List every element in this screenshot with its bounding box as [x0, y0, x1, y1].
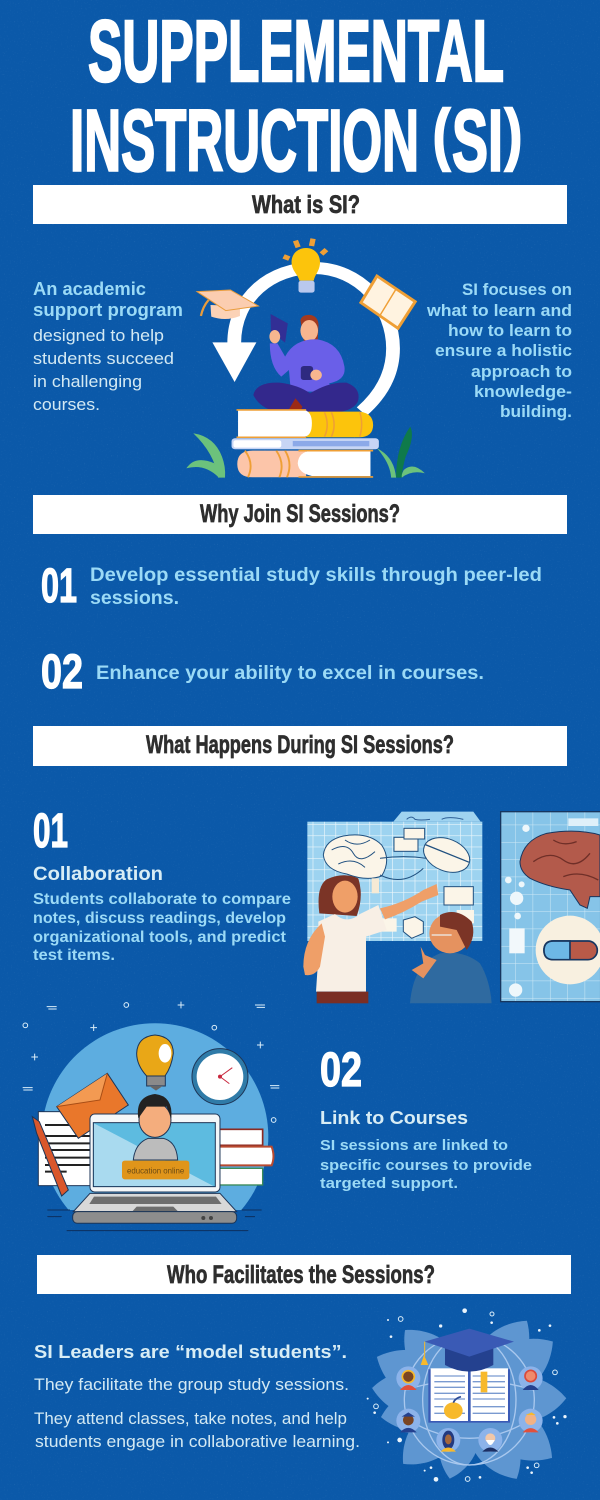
brain poster [501, 812, 600, 1002]
reason 01: Develop essential study skills through peer-led [90, 565, 542, 586]
text block: focus: what to learn and [426, 301, 572, 320]
text block: SI leaders: students engage in collaborative learning. [35, 1433, 360, 1451]
man with glasses [410, 912, 492, 1003]
laptop with student: education online [127, 1165, 184, 1175]
illustration: online education laptop [23, 1002, 279, 1231]
heading: who facilitates: Who Facilitates the Sessions? [167, 1261, 435, 1289]
icon: light bulb [137, 1035, 173, 1091]
reason 01: 01 [41, 560, 77, 613]
text block: SI leaders [34, 1342, 360, 1451]
laptop with student [47, 1094, 262, 1231]
icon: stack of books [232, 410, 379, 477]
icon: wall clock [192, 1049, 248, 1105]
step 01: collaboration: organizational tools, and predict [33, 929, 286, 946]
reason 02: 02 [41, 646, 83, 699]
decorative rings [374, 1312, 557, 1481]
icon: open book [361, 276, 415, 328]
step 02: link to courses: SI sessions are linked to [320, 1137, 508, 1154]
icon: left plant [186, 433, 225, 478]
step 01: collaboration [33, 805, 291, 964]
text block: focus: building. [500, 402, 572, 421]
reason 02: Enhance your ability to excel in courses. [96, 663, 484, 684]
icon: circular arrow [212, 268, 393, 412]
text block: SI leaders: SI Leaders are “model students”. [34, 1342, 347, 1362]
text block: SI leaders: They facilitate the group study sessions. [34, 1376, 349, 1394]
reason 01: sessions. [90, 588, 179, 609]
heading: what happens [33, 726, 567, 766]
title: SI [452, 92, 503, 190]
step 02: link to courses: Link to Courses [320, 1107, 468, 1128]
step 02: link to courses: specific courses to provide [320, 1157, 532, 1174]
panel: why join [33, 495, 567, 699]
heading: why join [33, 495, 567, 534]
circle backdrop [42, 1023, 268, 1210]
panel: what is SI [33, 185, 572, 478]
student avatars [396, 1366, 543, 1452]
graduation cap [421, 1329, 514, 1372]
text block: focus: approach to [471, 362, 572, 381]
icon: pencil [32, 1117, 68, 1196]
globe lines [404, 1335, 534, 1465]
step 01: collaboration: 01 [33, 805, 68, 858]
leaf wreath [367, 1307, 567, 1490]
step 01: collaboration: Collaboration [33, 864, 163, 885]
reason 02 [41, 646, 484, 699]
text block: definition: courses. [33, 395, 100, 414]
woman pointing [303, 875, 438, 1003]
step 02: link to courses: 02 [320, 1044, 362, 1097]
heading: what is SI [33, 185, 567, 224]
open book [428, 1368, 510, 1423]
title: ) [505, 96, 522, 172]
text block: SI leaders: They attend classes, take notes, and help [34, 1410, 347, 1428]
icon: document [38, 1112, 97, 1186]
person reading [253, 314, 359, 416]
decorative dots [367, 1308, 567, 1482]
text block: definition [33, 279, 183, 414]
illustration: people at a brain chart [303, 812, 600, 1003]
reason 01 [41, 560, 542, 613]
panel: what happens [23, 726, 600, 1231]
icon: envelope [57, 1073, 128, 1138]
panel: who facilitates [34, 1255, 571, 1490]
text block: focus: knowledge- [474, 382, 572, 401]
heading: why join: Why Join SI Sessions? [200, 500, 400, 528]
title [70, 3, 522, 190]
heading: what is SI: What is SI? [252, 191, 360, 219]
icon: light bulb [284, 239, 326, 293]
text block: focus: SI focuses on [462, 280, 572, 299]
step 02: link to courses [320, 1044, 532, 1192]
heading: what happens: What Happens During SI Sessions? [146, 731, 454, 759]
step 01: collaboration: notes, discuss readings, develop [33, 910, 286, 927]
text block: definition: support program [33, 300, 183, 320]
illustration: global learning community [367, 1307, 567, 1490]
text block: focus: how to learn to [448, 321, 572, 340]
text block: definition: designed to help [33, 326, 164, 345]
folder chart [307, 812, 482, 941]
text block: definition: An academic [33, 279, 146, 299]
illustration: student reading on books [186, 239, 425, 478]
icon: graduation cap [197, 290, 258, 319]
step 01: collaboration: test items. [33, 947, 115, 964]
text block: definition: in challenging [33, 372, 142, 391]
text block: definition: students succeed [33, 349, 174, 368]
decorative sparkles [23, 1002, 279, 1122]
step 02: link to courses: targeted support. [320, 1175, 458, 1192]
icon: stack of books [217, 1129, 273, 1185]
icon: right plant [377, 427, 425, 478]
step 01: collaboration: Students collaborate to compare [33, 891, 291, 908]
text block: focus: ensure a holistic [435, 341, 572, 360]
title: ( [433, 96, 450, 172]
text block: focus [426, 280, 572, 421]
heading: who facilitates [37, 1255, 571, 1294]
